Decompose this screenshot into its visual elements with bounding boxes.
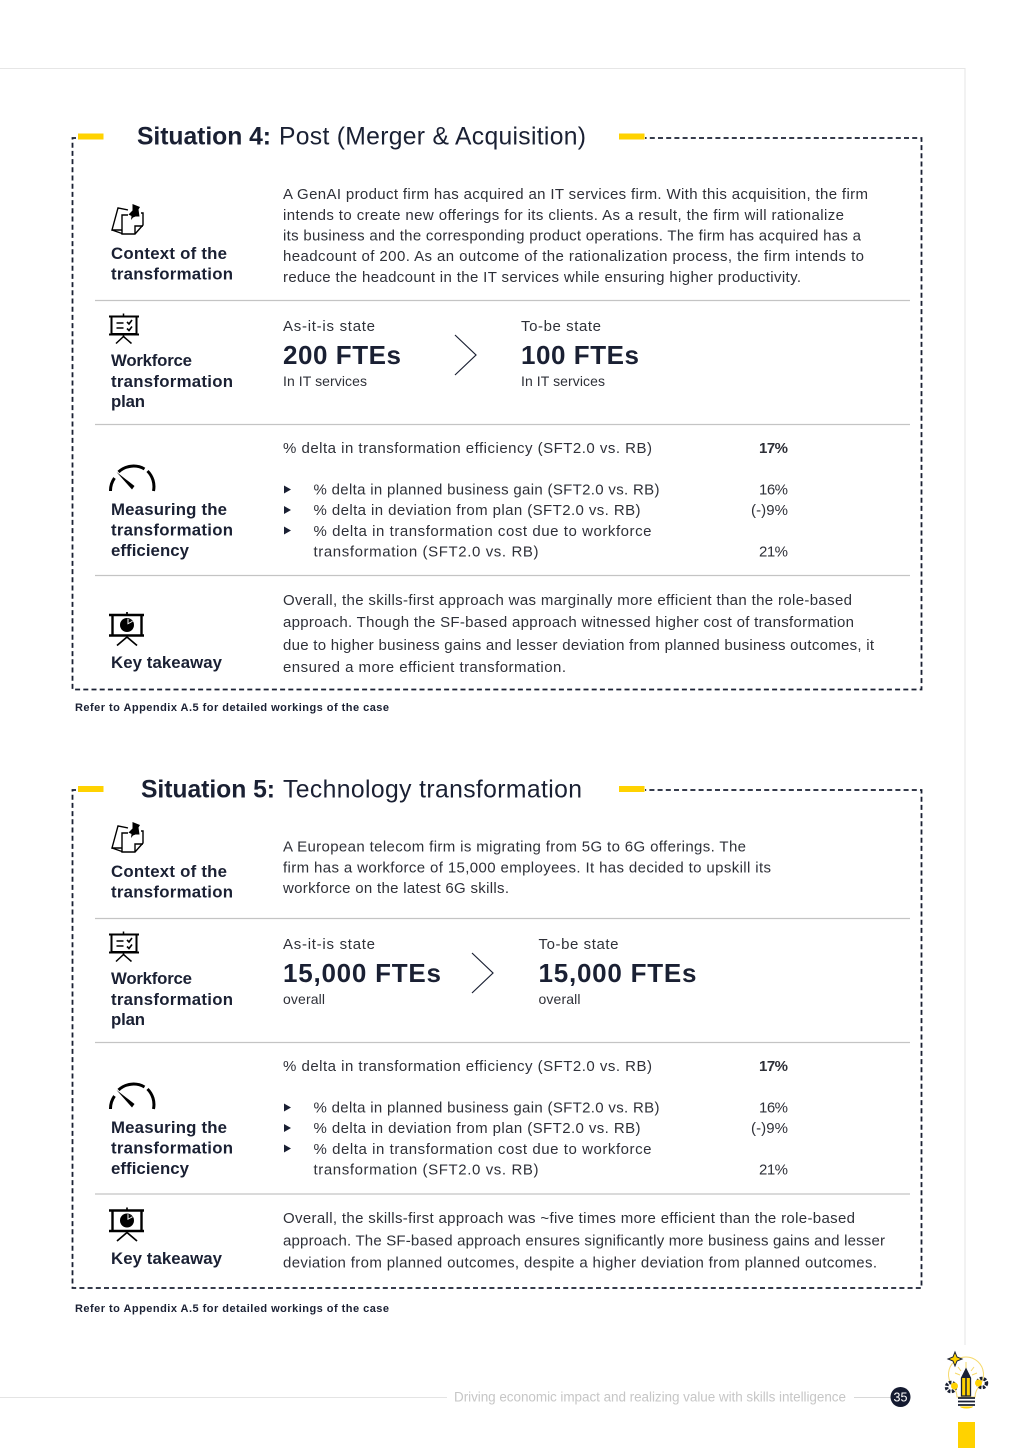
row label: workforce plan: plan <box>111 1010 145 1029</box>
row label: measuring efficiency: Measuring the <box>111 1118 227 1137</box>
footnote: situation 5: Refer to Appendix A.5 for detailed workings of the case <box>75 1303 389 1315</box>
row label: workforce plan: Workforce <box>111 351 192 370</box>
metrics list: % delta in transformation cost due to workforce <box>314 523 652 540</box>
metrics list <box>283 1058 788 1178</box>
metrics list: 17% <box>759 440 788 457</box>
icon: notes with pin <box>112 822 143 852</box>
icon: presentation checklist <box>109 932 139 962</box>
heading: situation 4: Situation 4: <box>137 124 271 150</box>
as-is state: As-it-is state <box>283 318 375 335</box>
heading subtitle: situation 5: Technology transformation <box>283 776 582 804</box>
row label: measuring efficiency: Measuring the <box>111 500 227 519</box>
row label: context: transformation <box>111 882 233 902</box>
row label: workforce plan: transformation <box>111 372 233 391</box>
panel frame: situation 5 <box>72 790 922 1288</box>
text: takeaway paragraph: ensured a more efficient transformation. <box>283 659 566 676</box>
text: context paragraph: headcount of 200. As an outcome of the rationalization process, the firm intends to <box>283 248 864 265</box>
footnote: situation 4: Refer to Appendix A.5 for detailed workings of the case <box>75 702 389 714</box>
as-is state: overall <box>283 991 325 1007</box>
text: context paragraph: A GenAI product firm has acquired an IT services firm. With this acquisition, the firm <box>283 186 868 203</box>
metrics list <box>283 440 788 560</box>
page number <box>890 1387 910 1407</box>
metrics list: % delta in transformation efficiency (SFT2.0 vs. RB) <box>283 440 652 457</box>
metrics list: % delta in deviation from plan (SFT2.0 vs. RB) <box>314 1120 640 1137</box>
text: context paragraph: A European telecom firm is migrating from 5G to 6G offerings. The <box>283 838 746 856</box>
row label: context: Context of the <box>111 862 227 881</box>
metrics list: 21% <box>759 544 788 560</box>
metrics list: % delta in planned business gain (SFT2.0 vs. RB) <box>314 482 660 498</box>
metrics list: % delta in transformation efficiency (SFT2.0 vs. RB) <box>283 1058 652 1075</box>
as-is state <box>283 936 441 1007</box>
metrics list: (-)9% <box>751 502 788 519</box>
row label: workforce plan: plan <box>111 392 145 411</box>
text: takeaway paragraph: Overall, the skills-first approach was ~five times more efficient than the role-based <box>283 1210 855 1227</box>
row label: measuring efficiency: efficiency <box>111 1159 190 1178</box>
to-be state: To-be state <box>521 318 601 335</box>
row label: context: transformation <box>111 264 233 284</box>
as-is state: In IT services <box>283 373 367 389</box>
text: context paragraph: its business and the corresponding product operations. The firm has acquired has a <box>283 228 862 244</box>
text: context paragraph: intends to create new offerings for its clients. As a result, the firm will rationalize <box>283 207 844 224</box>
panel frame: situation 4 <box>72 138 922 690</box>
to-be state: 15,000 FTEs <box>538 958 696 988</box>
panel: situation 4 <box>72 124 922 690</box>
icon: gauge <box>110 1084 154 1109</box>
metrics list: 16% <box>759 1100 788 1116</box>
row label: workforce plan: Workforce <box>111 969 192 988</box>
accent bar: page corner <box>958 1422 975 1448</box>
icon: presentation checklist <box>109 314 139 344</box>
text: context paragraph: firm has a workforce of 15,000 employees. It has decided to upskill its <box>283 860 771 876</box>
row label: measuring efficiency: transformation <box>111 520 233 540</box>
page number: 35 <box>894 1390 907 1404</box>
footer rule left <box>0 1396 447 1398</box>
row label: measuring efficiency: transformation <box>111 1138 233 1158</box>
arrow: chevron <box>472 953 493 993</box>
row label: key takeaway: Key takeaway <box>111 653 223 672</box>
heading accent bars: situation 5 <box>78 786 644 792</box>
heading subtitle: situation 4: Post (Merger & Acquisition) <box>279 124 586 150</box>
heading accent bars: situation 4 <box>78 134 644 140</box>
to-be state: To-be state <box>538 936 618 953</box>
metrics list: % delta in transformation cost due to workforce <box>314 1141 652 1158</box>
icon: presentation pie chart <box>109 612 144 646</box>
as-is state: 200 FTEs <box>283 340 401 370</box>
as-is state <box>283 318 401 389</box>
heading: situation 5: Situation 5: <box>141 776 275 804</box>
icon: lightbulb pencil with gears <box>946 1352 986 1408</box>
metrics list: % delta in deviation from plan (SFT2.0 vs. RB) <box>314 502 640 519</box>
icon: presentation pie chart <box>109 1208 144 1241</box>
to-be state: overall <box>538 991 580 1007</box>
to-be state: 100 FTEs <box>521 340 639 370</box>
text: takeaway paragraph: approach. Though the SF-based approach witnessed higher cost of transformation <box>283 614 854 631</box>
text: takeaway paragraph: Overall, the skills-first approach was marginally more efficient than the role-based <box>283 592 852 609</box>
text: context paragraph: workforce on the latest 6G skills. <box>282 880 509 897</box>
text: takeaway paragraph: approach. The SF-based approach ensures significantly more business gains and lesser <box>283 1232 885 1250</box>
icon: notes with pin <box>112 204 143 234</box>
footer rule right <box>854 1396 891 1398</box>
metrics list: 16% <box>759 482 788 498</box>
as-is state: 15,000 FTEs <box>283 958 441 988</box>
metrics list: 17% <box>759 1058 788 1075</box>
row label: key takeaway: Key takeaway <box>111 1249 223 1268</box>
row label: context: Context of the <box>111 244 227 263</box>
to-be state <box>521 318 639 389</box>
text: takeaway paragraph: deviation from planned outcomes, despite a higher deviation from planned outcomes. <box>283 1254 877 1272</box>
metrics list: transformation (SFT2.0 vs. RB) <box>314 1162 538 1178</box>
row label: measuring efficiency: efficiency <box>111 541 190 560</box>
footer text: Driving economic impact and realizing value with skills intelligence <box>454 1390 846 1404</box>
arrow: chevron <box>455 335 476 375</box>
metrics list: (-)9% <box>751 1120 788 1137</box>
to-be state: In IT services <box>521 373 605 389</box>
metrics list: 21% <box>759 1162 788 1178</box>
row label: workforce plan: transformation <box>111 990 233 1009</box>
metrics list: % delta in planned business gain (SFT2.0 vs. RB) <box>314 1100 660 1116</box>
panel: situation 5 <box>72 776 922 1288</box>
icon: gauge <box>110 466 154 491</box>
text: context paragraph: reduce the headcount in the IT services while ensuring higher productivity. <box>283 269 801 286</box>
to-be state <box>538 936 696 1007</box>
text: takeaway paragraph: due to higher business gains and lesser deviation from planned business outcomes, it <box>283 637 875 654</box>
metrics list: transformation (SFT2.0 vs. RB) <box>314 544 538 560</box>
as-is state: As-it-is state <box>283 936 375 953</box>
